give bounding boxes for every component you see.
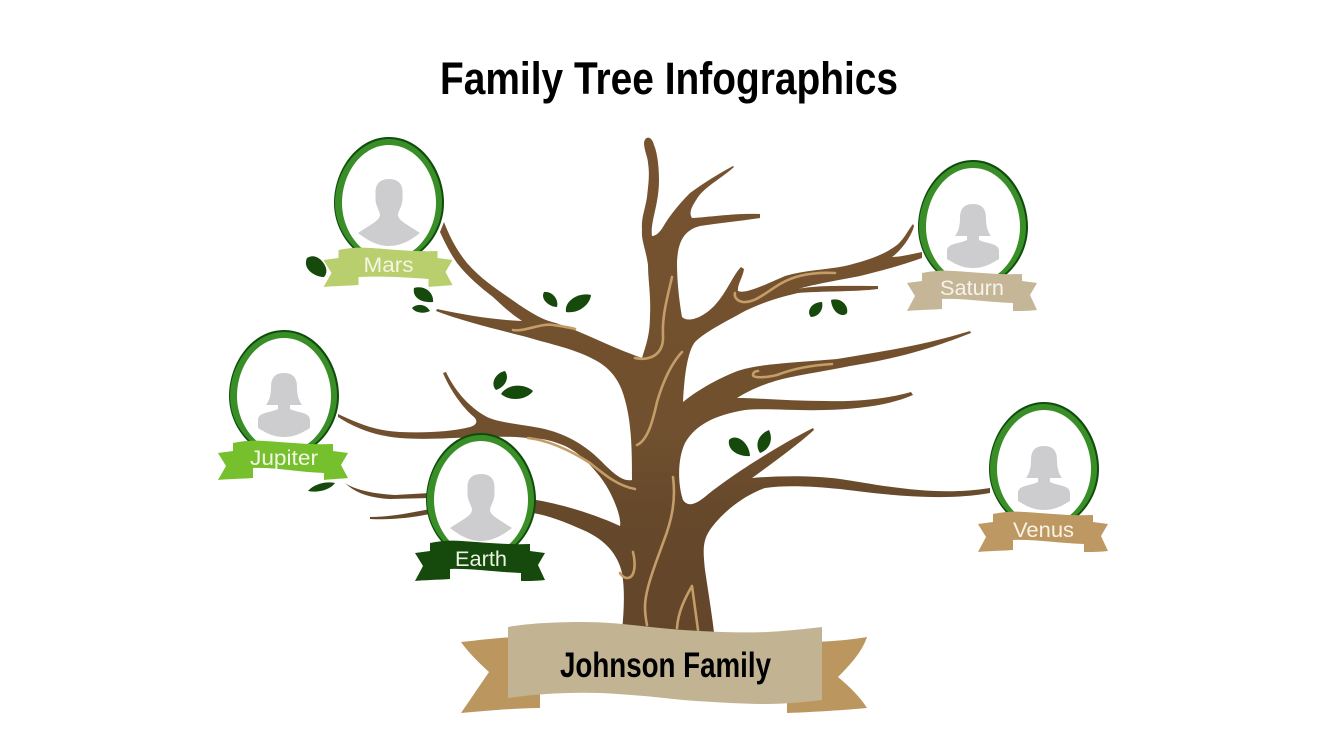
Earth twig upper [345,483,430,499]
banner label: Johnson Family [560,646,771,685]
Earth twig lower [370,509,430,519]
tree [338,138,990,632]
frame [229,330,339,458]
banner left tail [461,637,540,713]
silhouette [947,204,999,268]
banner right tail [787,637,867,713]
leaf [543,292,557,307]
leaf [729,437,750,456]
silhouette [1018,446,1070,510]
label: Earth [455,547,507,571]
leaf [412,305,430,313]
ribbon: Saturn [907,271,1037,311]
leaf [501,386,533,399]
leaf [809,302,822,317]
silhouette [258,373,310,437]
portrait: Venus [989,402,1099,531]
label: Jupiter [250,446,318,470]
banner panel [508,622,822,704]
portrait: Mars [334,137,444,265]
leaf [414,287,433,302]
leaves [306,256,847,492]
banner: Johnson Family [461,622,867,713]
silhouette [358,179,420,246]
portrait: Saturn [918,160,1028,289]
portrait: Earth [426,433,536,562]
tree trunk and branches [338,138,990,632]
label: Saturn [940,276,1004,300]
leaf [566,294,591,312]
leaf [308,482,335,492]
leaf [757,430,771,453]
frame [989,402,1099,531]
ribbon: Jupiter [218,441,348,480]
label: Mars [364,253,414,277]
silhouette [450,474,512,541]
frame [334,137,444,265]
ribbon: Earth [415,541,545,581]
bark veins [513,273,835,630]
portrait: Jupiter [229,330,339,458]
leaf [493,371,507,390]
title: Family Tree Infographics [440,53,898,104]
ribbon: Venus [978,512,1108,552]
label: Venus [1013,518,1074,542]
leaf [306,256,326,277]
leaf [831,299,847,315]
ribbon: Mars [324,248,452,287]
frame [426,433,536,562]
frame [918,160,1028,289]
